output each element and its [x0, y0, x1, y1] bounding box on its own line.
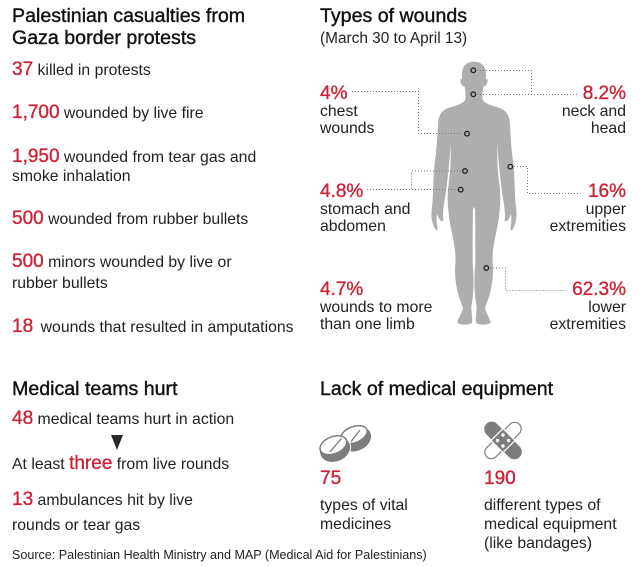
text: medicines: types of vital [320, 497, 408, 514]
subheading: dates: (March 30 to April 13) [320, 30, 467, 47]
label: upper extremities: 16% [588, 181, 626, 202]
label: more than one limb: than one limb [320, 316, 415, 333]
label: lower extremities [550, 279, 626, 333]
number: medicines: 75 [320, 468, 341, 489]
stat: killed: 37 killed in protests [12, 59, 151, 80]
label: neck and head: head [591, 120, 626, 137]
wound markers [458, 68, 513, 270]
icon: bandage [484, 422, 522, 460]
silhouette [431, 62, 517, 325]
label: stomach and abdomen: stomach and [320, 201, 410, 218]
heading: casualties [12, 5, 245, 49]
text: equipment: different types of [484, 497, 601, 514]
stat: tear gas: 1,950 wounded from tear gas and [12, 146, 256, 167]
text: equipment [484, 497, 617, 552]
stat: medical teams: 48 medical teams hurt in action [12, 408, 234, 429]
text: medicines [320, 497, 408, 533]
stat: minors [12, 251, 232, 292]
label: lower extremities: extremities [550, 316, 626, 333]
heading: medical teams: Medical teams hurt [12, 378, 178, 400]
leader lines [352, 70, 583, 290]
label: lower extremities: lower [588, 299, 626, 316]
stat: rubber bullets: 500 wounded from rubber bullets [12, 208, 248, 229]
label: neck and head: 8.2% [583, 83, 626, 104]
source: Source: Palestinian Health Ministry and MAP (Medical Aid for Palestinians) [12, 548, 427, 562]
label: more than one limb: wounds to more [320, 299, 432, 316]
label: more than one limb: 4.7% [320, 279, 363, 300]
number: equipment: 190 [484, 468, 516, 489]
heading: equipment: Lack of medical equipment [320, 378, 553, 400]
stat: ambulances: 13 ambulances hit by live [12, 489, 193, 510]
label: stomach and abdomen: 4.8% [320, 181, 363, 202]
heading: types of wounds: Types of wounds [320, 5, 467, 27]
label: stomach and abdomen [320, 181, 410, 235]
label: more than one limb [320, 279, 432, 333]
label: lower extremities: 62.3% [572, 279, 626, 300]
label: chest wounds [320, 83, 374, 137]
heading: casualties: Palestinian casualties from [12, 5, 245, 27]
stat: live rounds: At least three from live rounds [12, 453, 229, 474]
stat: tear gas: smoke inhalation [12, 168, 131, 185]
text: equipment: medical equipment [484, 516, 617, 533]
stat: ambulances: rounds or tear gas [12, 517, 140, 534]
stat: minors: 500 minors wounded by live or [12, 251, 232, 272]
label: upper extremities: upper [586, 201, 626, 218]
stat: tear gas [12, 146, 256, 185]
label: neck and head [562, 83, 626, 137]
icon: down arrow [111, 435, 123, 450]
heading: casualties: Gaza border protests [12, 27, 196, 49]
icon: pills [319, 424, 372, 462]
text: equipment: (like bandages) [484, 535, 592, 552]
label: upper extremities [550, 181, 626, 235]
label: neck and head: neck and [562, 103, 626, 120]
label: chest wounds: wounds [320, 120, 374, 137]
text: medicines: medicines [320, 516, 391, 533]
stat: amputations: 18 wounds that resulted in amputations [12, 316, 294, 336]
stat: live fire: 1,700 wounded by live fire [12, 102, 204, 123]
stat: ambulances [12, 489, 193, 534]
stat: minors: rubber bullets [12, 275, 108, 292]
label: chest wounds: 4% [320, 83, 347, 104]
label: stomach and abdomen: abdomen [320, 218, 386, 235]
label: chest wounds: chest [320, 103, 358, 120]
label: upper extremities: extremities [550, 218, 626, 235]
